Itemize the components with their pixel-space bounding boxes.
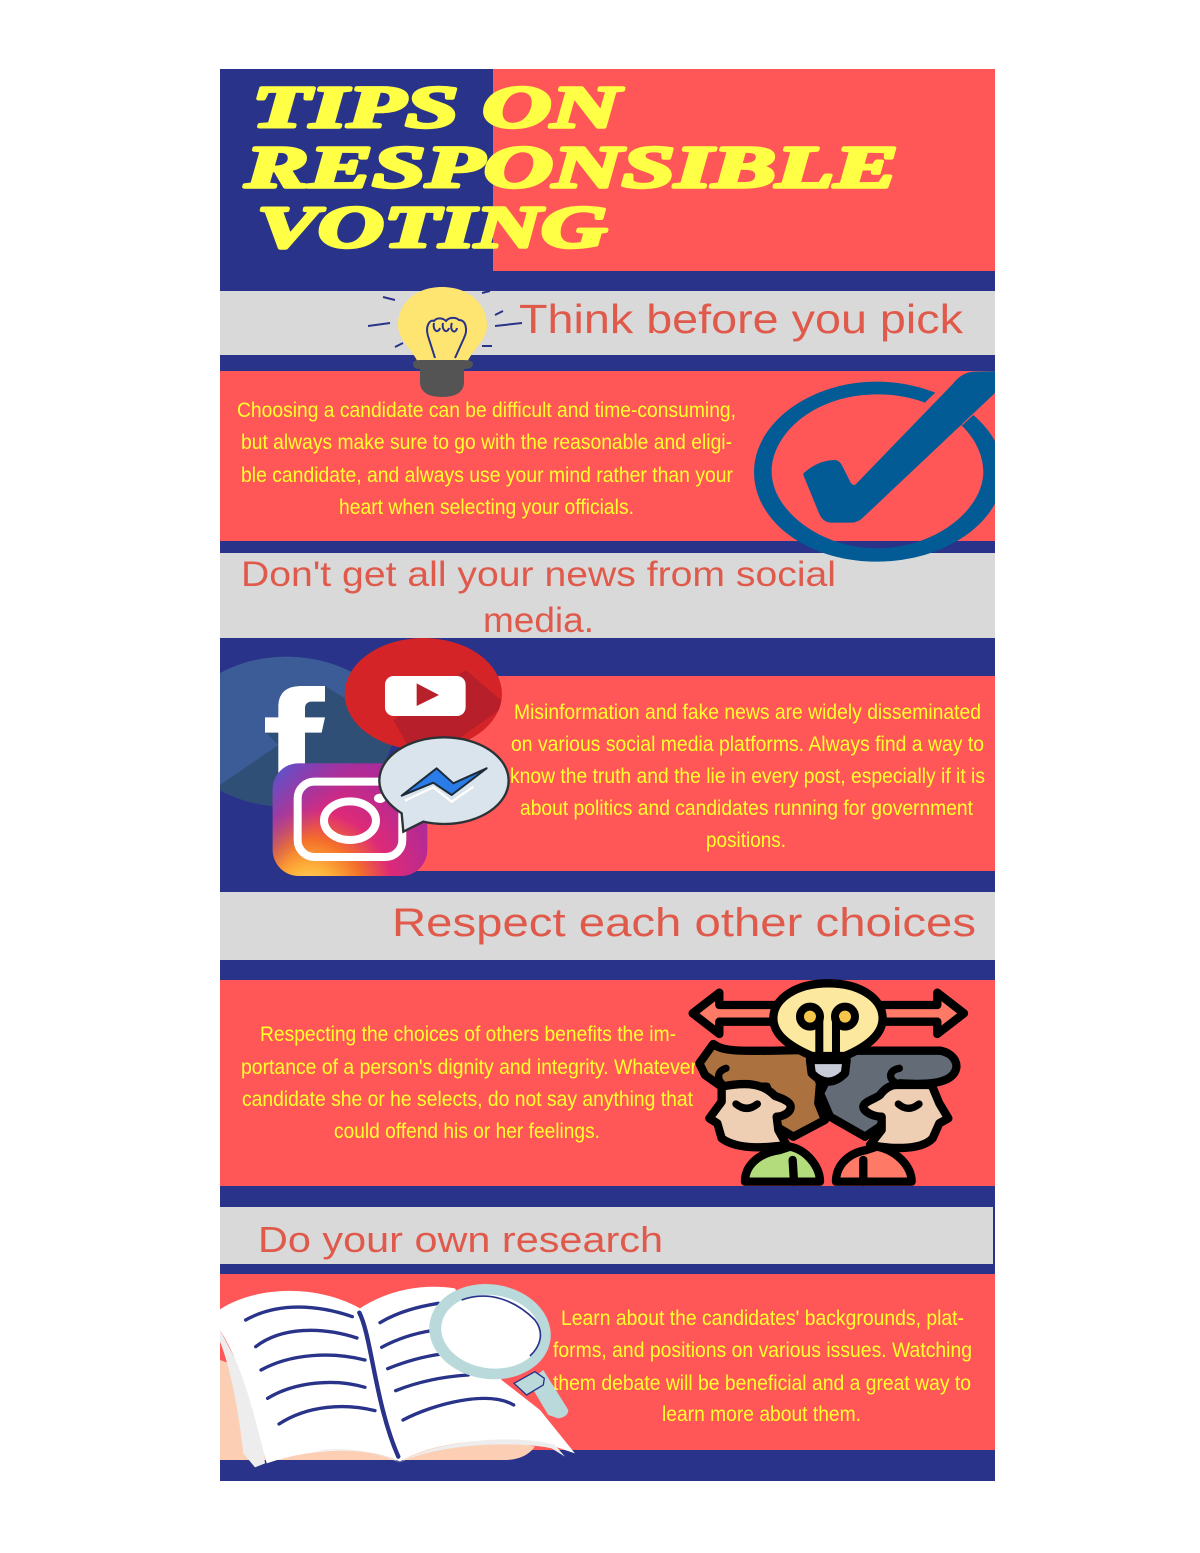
body band: [400, 676, 995, 871]
body text: Misinformation and fake news are widely disseminated: [514, 701, 981, 724]
body band: [220, 1274, 995, 1450]
heading: Do your own research: [258, 1219, 663, 1260]
section 1: think before you pick: [220, 287, 995, 541]
body text: know the truth and the lie in every post, especially if it is: [510, 765, 985, 788]
heading: Don't get all your news from social: [241, 555, 836, 594]
section 2: social media: [180, 371, 1003, 876]
body text: Choosing a candidate can be difficult and time-consuming,: [237, 399, 736, 422]
body band: [220, 371, 995, 541]
book pages: [220, 1287, 575, 1467]
heading band: [220, 892, 995, 960]
heading band: [220, 1207, 993, 1264]
body text: candidate she or he selects, do not say anything that: [242, 1088, 693, 1111]
infographic canvas: [220, 69, 995, 1481]
body text: forms, and positions on various issues. Watching: [553, 1339, 972, 1362]
icon: facebook: [220, 656, 392, 806]
body text: them debate will be beneficial and a great way to: [553, 1372, 971, 1395]
icon: two people and light bulb: [693, 983, 964, 1182]
body text: [553, 1307, 972, 1426]
section 4: do your own research: [220, 1207, 995, 1467]
icon: arrows: [693, 993, 964, 1034]
icon: messenger: [379, 737, 509, 832]
icon: instagram: [273, 763, 427, 876]
icon: bulb: [773, 983, 883, 1082]
icon: right person: [820, 1051, 956, 1182]
book text lines: [246, 1303, 514, 1457]
navy background panel: [220, 69, 995, 1481]
icon: social media logos: [220, 638, 510, 876]
icon: youtube: [344, 638, 502, 748]
magnifier: [423, 1276, 568, 1418]
body band: [220, 980, 995, 1186]
body text: Respecting the choices of others benefits the im-: [260, 1023, 676, 1046]
icon: left person: [699, 1044, 825, 1182]
body text: [510, 701, 985, 852]
section 3: respect choices: [220, 892, 995, 1186]
body text: on various social media platforms. Always find a way to: [511, 733, 984, 756]
title: VOTING: [257, 194, 607, 260]
icon: open book with magnifier: [220, 1276, 575, 1467]
heading band: [220, 553, 995, 638]
heading: Respect each other choices: [392, 901, 976, 945]
title: RESPONSIBLE: [243, 134, 898, 200]
icon: light bulb: [368, 287, 522, 397]
body text: but always make sure to go with the reasonable and eligi-: [241, 431, 732, 454]
body text: portance of a person's dignity and integrity. Whatever: [241, 1056, 697, 1079]
body text: could offend his or her feelings.: [334, 1120, 600, 1143]
heading: media.: [483, 601, 594, 640]
title: [243, 74, 898, 260]
header red block: [493, 69, 995, 271]
title: TIPS ON: [252, 74, 624, 140]
header panel: [243, 69, 995, 271]
body text: heart when selecting your officials.: [339, 496, 634, 519]
heading: [241, 555, 836, 640]
body text: about politics and candidates running for government: [520, 797, 973, 820]
heading: Think before you pick: [519, 296, 964, 342]
heading band: [220, 291, 995, 355]
body text: [237, 399, 736, 519]
body text: positions.: [706, 829, 786, 852]
body text: Learn about the candidates' backgrounds, plat-: [561, 1307, 964, 1330]
body text: [241, 1023, 697, 1143]
body text: ble candidate, and always use your mind rather than your: [241, 464, 733, 487]
icon: check mark: [754, 371, 1003, 562]
body text: learn more about them.: [662, 1403, 861, 1426]
